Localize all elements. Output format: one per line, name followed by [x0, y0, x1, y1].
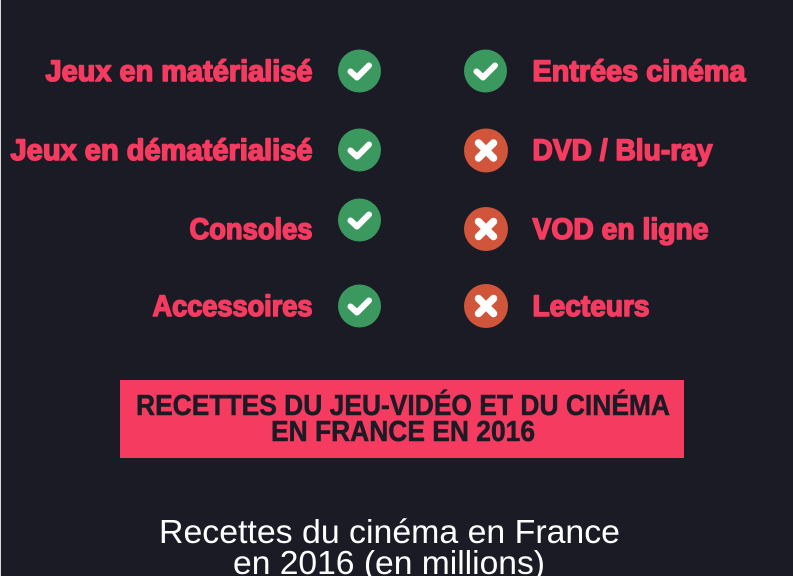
label: DVD / Blu-ray: DVD / Blu-ray — [532, 134, 713, 167]
icon: check, Jeux en dématérialisé — [338, 128, 381, 172]
label: Lecteurs: Lecteurs — [532, 290, 650, 323]
icon: check, Jeux en matérialisé — [338, 50, 381, 92]
label: Consoles: Consoles — [190, 213, 312, 246]
label: VOD en ligne: VOD en ligne — [532, 213, 708, 246]
banner: section heading: EN FRANCE EN 2016 — [271, 416, 535, 448]
icon: cross, VOD en ligne — [464, 207, 508, 251]
label: Jeux en dématérialisé: Jeux en dématérialisé — [10, 134, 312, 167]
icon: cross, Lecteurs — [464, 284, 508, 328]
banner: section heading: RECETTES DU JEU-VIDÉO ET DU CINÉMA — [136, 390, 670, 422]
icon: check, Accessoires — [338, 284, 381, 328]
banner: section heading — [120, 380, 684, 458]
chart title: Recettes du cinéma en France — [159, 513, 620, 550]
icon: check, Entrées cinéma — [464, 50, 507, 92]
label: Entrées cinéma: Entrées cinéma — [532, 55, 746, 88]
label: Accessoires: Accessoires — [152, 290, 312, 323]
label: Jeux en matérialisé: Jeux en matérialisé — [46, 55, 312, 88]
icon: check, Consoles — [338, 198, 381, 242]
icon: cross, DVD / Blu-ray — [464, 128, 508, 172]
chart title — [159, 513, 620, 576]
